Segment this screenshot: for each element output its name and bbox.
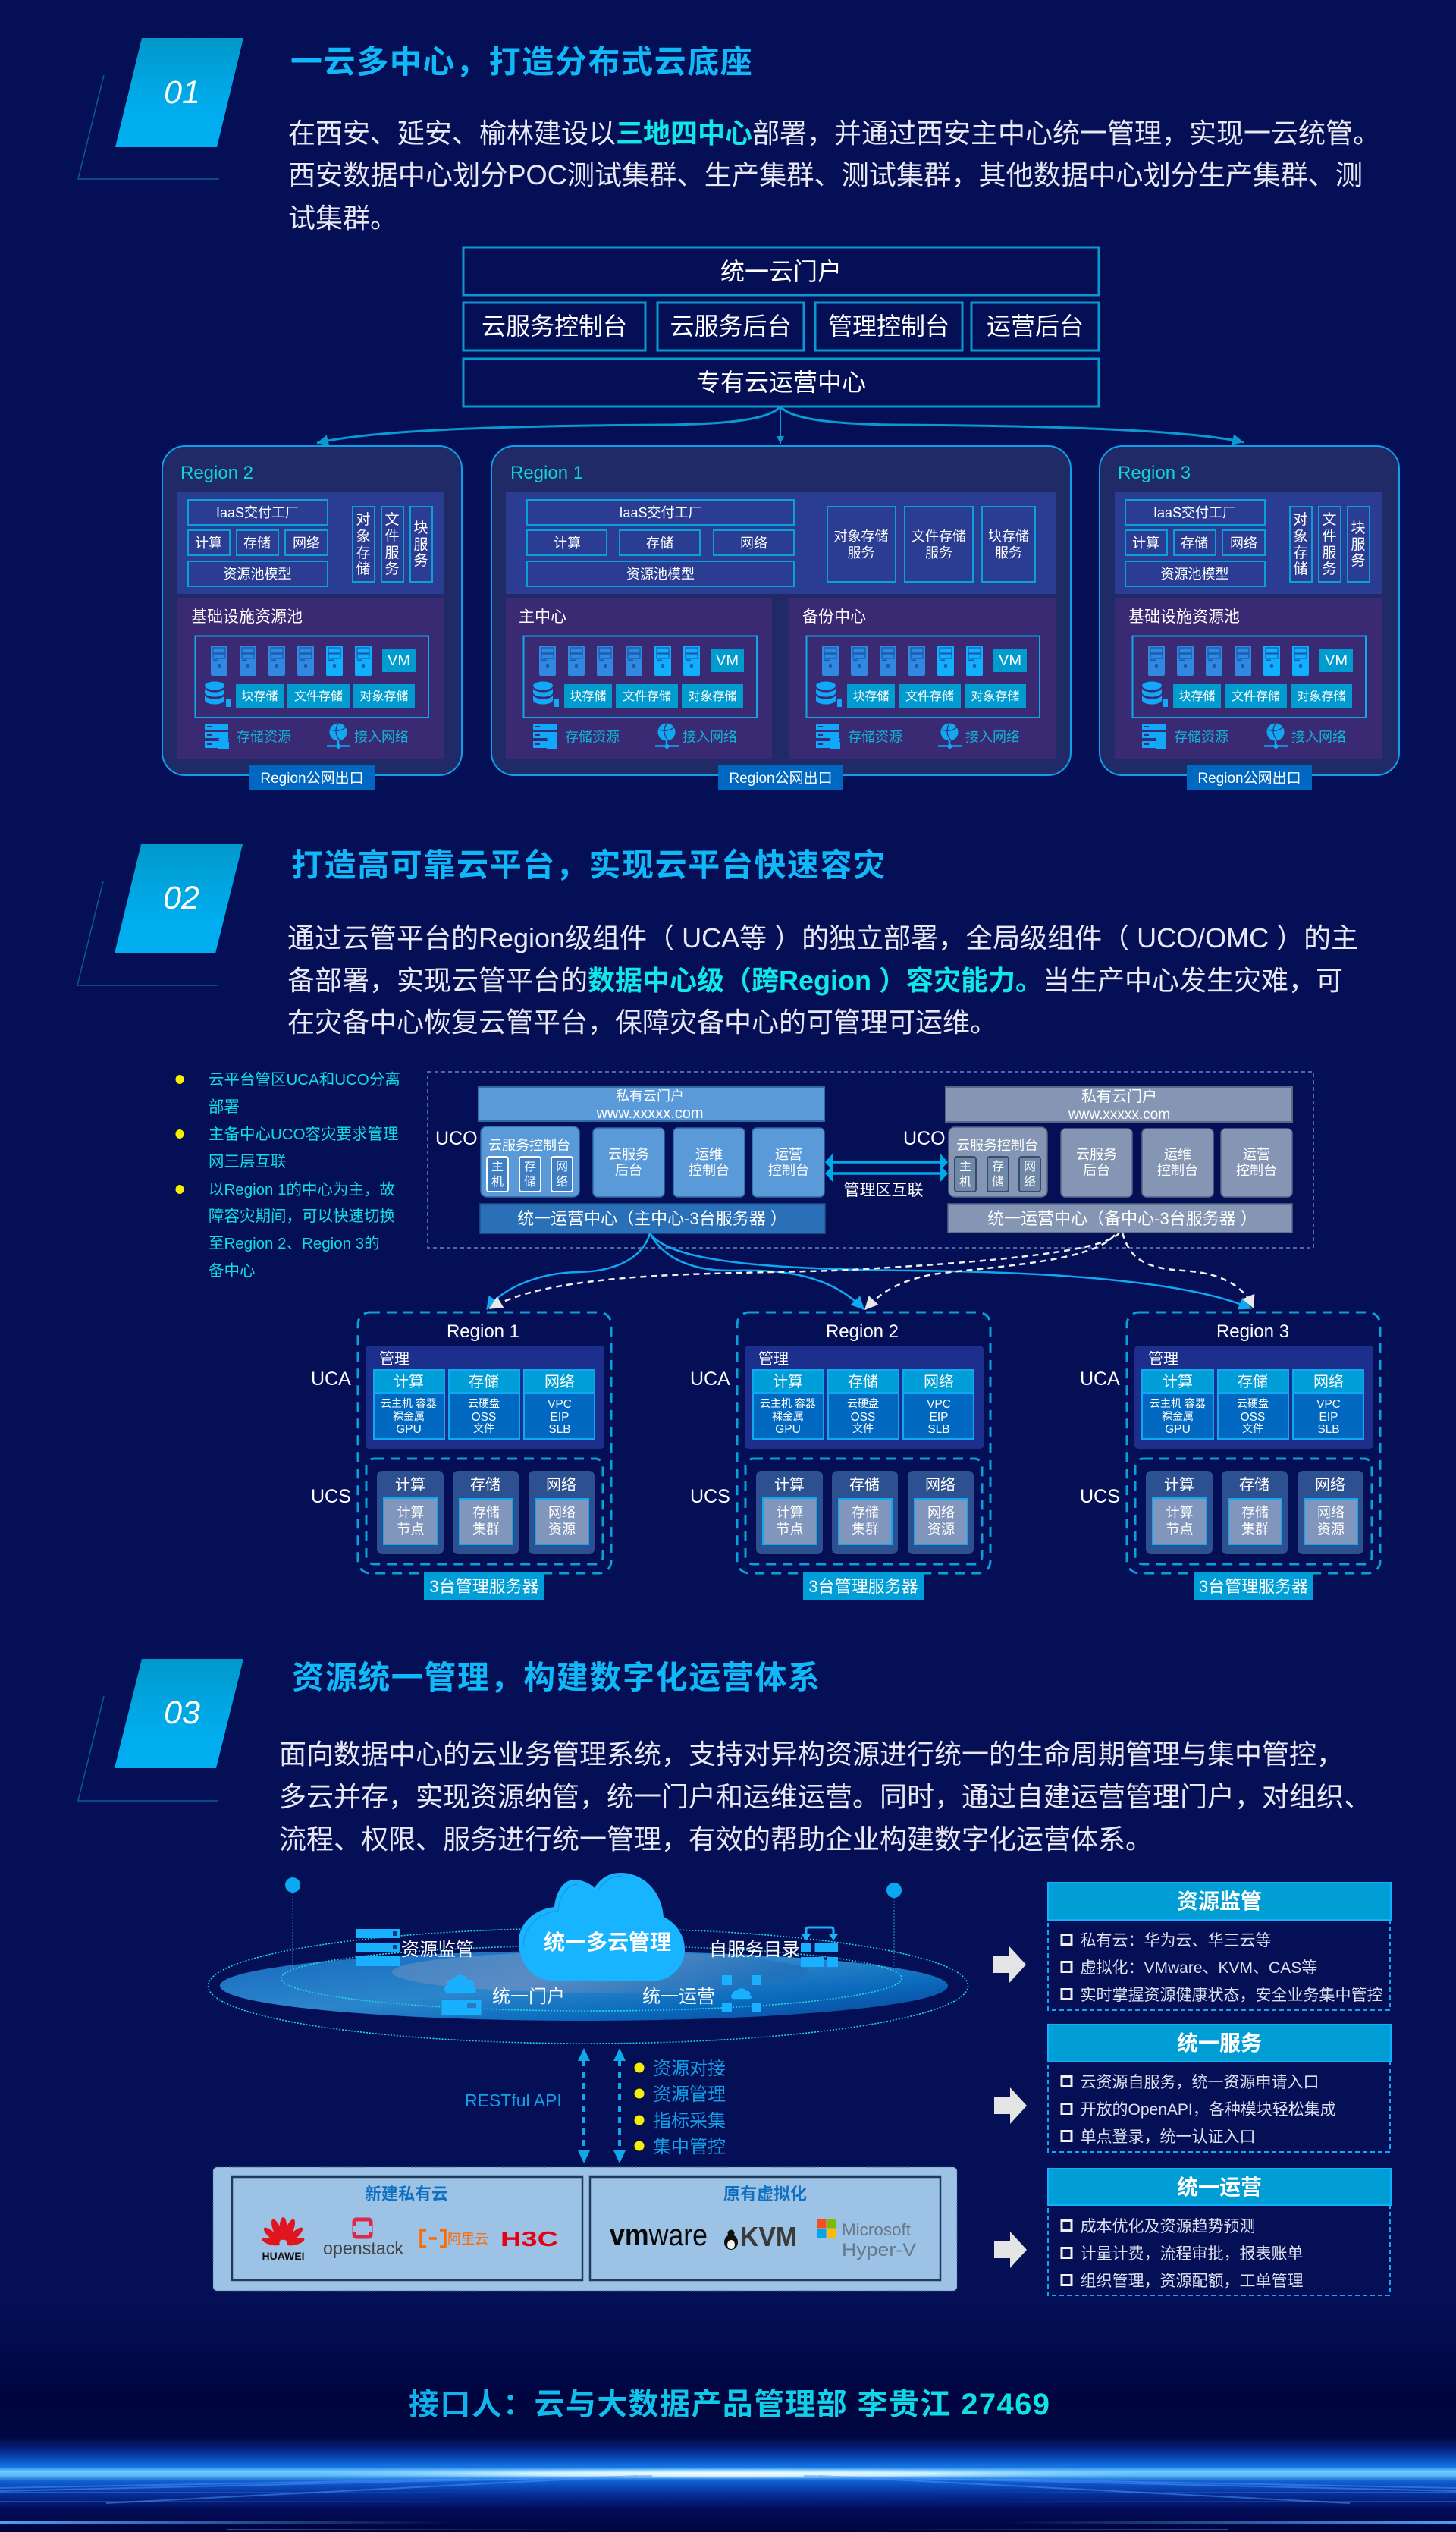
panel: S2 Region 1: 计算: [394, 1373, 424, 1390]
panel: Region 2: 资源池模型: [223, 567, 291, 582]
panel: S2 Region 1: 存储: [470, 1476, 500, 1494]
panel: Region 2: 储: [356, 561, 371, 577]
backup UCO cluster: 云服务: [1076, 1147, 1117, 1162]
primary UCO cluster: 网: [556, 1161, 568, 1173]
panel: Region 3: 服: [1322, 545, 1337, 561]
logo: Aliyun: [421, 2230, 488, 2247]
bullet notes: 至Region 2、Region 3的: [209, 1235, 380, 1252]
panel: S2 Region 3: 资源: [1317, 1522, 1345, 1537]
icon: unified operation: [642, 1975, 761, 2012]
panel: S2 Region 1: 计算: [397, 1505, 425, 1520]
badge 03: 03: [164, 1695, 200, 1731]
panel: S2 Region 3: 存储: [1239, 1476, 1269, 1494]
panel: resource monitoring: [1048, 1883, 1391, 2010]
arrows: portal to regions: [317, 407, 1244, 444]
primary UCO cluster: 机: [491, 1175, 504, 1189]
icon: unified portal: 统一门户: [492, 1987, 565, 2007]
panel: S2 Region 2: UCS: [690, 1486, 730, 1507]
panel: unified operation: 计量计费，流程审批，报表账单: [1080, 2245, 1303, 2263]
panel: Region 2: [162, 446, 462, 790]
box: console row: 云服务控制台: [482, 313, 627, 340]
icon: unified operation: 统一运营: [642, 1987, 715, 2007]
backup UCO cluster: UCO: [903, 1128, 946, 1149]
panel: Region 2: 块存储: [241, 690, 278, 703]
primary UCO cluster: 存: [524, 1160, 536, 1173]
panel: Region 3: 文件存储: [1232, 690, 1280, 703]
panel: S2 Region 3: 网络: [1315, 1476, 1345, 1494]
panel: unified operation: [1048, 2169, 1391, 2295]
panel: unified operation: 成本优化及资源趋势预测: [1080, 2218, 1256, 2235]
logo: openstack: [323, 2219, 404, 2259]
panel: Region 2: 对象存储: [359, 690, 409, 703]
badge 01: [78, 38, 243, 179]
dashed UCO frame: [428, 1072, 1313, 1248]
portal stack diagram: [463, 247, 1099, 407]
icon: central cloud: 统一多云管理: [544, 1930, 671, 1954]
panel: S2 Region 3: 集群: [1241, 1522, 1269, 1537]
badge 03: [78, 1659, 243, 1801]
curves to regions: [487, 1233, 1254, 1309]
logo: Microsoft Hyper-V: Microsoft: [842, 2220, 911, 2239]
API arrows: [465, 2048, 626, 2163]
panel: S2 Region 2: GPU: [775, 1423, 801, 1436]
logo: Huawei: [262, 2217, 305, 2262]
panel: S2 Region 3: 计算: [1166, 1505, 1194, 1520]
panel: Region 1: 块存储: [852, 690, 890, 703]
panel: Region 3: IaaS交付工厂: [1153, 505, 1236, 520]
panel: S2 Region 1: Region 1: [447, 1321, 519, 1342]
panel: S2 Region 2: 网络: [927, 1505, 955, 1520]
panel: Region 2: 接入网络: [354, 730, 409, 745]
panel: Region 3: 网络: [1230, 536, 1257, 551]
box: console row: 云服务后台: [670, 313, 792, 340]
panel: Region 2: 文件存储: [294, 690, 343, 703]
panel: Region 3: 务: [1351, 552, 1366, 569]
panel: S2 Region 2: 文件: [852, 1422, 874, 1434]
primary UCO cluster: 络: [556, 1174, 568, 1189]
panel: Region 1: 接入网络: [682, 730, 737, 745]
panel: Region 1: 文件存储: [905, 690, 954, 703]
paragraph 01: [288, 118, 1380, 234]
panel: S2 Region 3: 存储: [1241, 1505, 1269, 1520]
panel: Region 1: [491, 446, 1071, 790]
panel: S2 Region 2: 云硬盘: [847, 1397, 879, 1409]
panel: Region 1: 存储资源: [848, 730, 902, 745]
panel: unified operation: 统一运营: [1177, 2175, 1262, 2199]
box: unified portal: [463, 247, 1099, 295]
backup UCO cluster: 存: [992, 1160, 1004, 1173]
management interconnect arrows: 管理区互联: [843, 1182, 924, 1199]
panel: S2 Region 3: VPC: [1316, 1398, 1341, 1411]
paragraph 02: 备部署，实现云管平台的数据中心级（跨Region ）容灾能力。当生产中心发生灾难，可: [287, 965, 1343, 996]
panel: S2 Region 1: 裸金属: [393, 1410, 425, 1422]
paragraph 03: [279, 1739, 1371, 1855]
box: operations center: 专有云运营中心: [696, 369, 866, 396]
panel: unified operation: 组织管理，资源配额，工单管理: [1080, 2273, 1303, 2290]
panel: S2 Region 1: 云主机 容器: [381, 1397, 437, 1409]
primary UCO cluster: 运营: [775, 1147, 802, 1162]
logo: H3C: H3C: [500, 2227, 558, 2251]
panel: S2 Region 1: 节点: [397, 1522, 425, 1537]
panel: Region 1: 对象存储: [688, 690, 737, 703]
primary UCO cluster: 主: [491, 1160, 504, 1173]
heading 02: 打造高可靠云平台，实现云平台快速容灾: [291, 847, 886, 883]
panel: resource monitoring: 资源监管: [1177, 1890, 1262, 1913]
icon: unified portal: [441, 1975, 565, 2015]
panel: S2 Region 2: EIP: [930, 1411, 948, 1424]
panel: resource monitoring: 虚拟化：VMware、KVM、CAS等: [1080, 1959, 1317, 1977]
panel: Region 3: VM: [1325, 652, 1348, 669]
primary UCO cluster: 后台: [615, 1163, 642, 1178]
panel: Region 2: 存储: [243, 536, 271, 551]
panel: S2 Region 2: 存储: [852, 1505, 879, 1520]
bullet notes: 云平台管区UCA和UCO分离: [209, 1071, 400, 1089]
panel: Region 3: 接入网络: [1291, 730, 1346, 745]
panel: S2 Region 3: 云硬盘: [1237, 1397, 1269, 1409]
panel: Region 2: 计算: [195, 536, 222, 551]
panel: Region 1: Region 1: [510, 463, 583, 483]
primary UCO cluster: 云服务: [608, 1147, 649, 1162]
box: console row: 管理控制台: [828, 313, 949, 340]
backup UCO cluster: 私有云门户: [1081, 1088, 1157, 1105]
badge 02: 02: [163, 880, 199, 916]
panel: S2 Region 3: EIP: [1320, 1411, 1338, 1424]
panel: Region 1: 存储资源: [565, 730, 620, 745]
section 03: [78, 1659, 1391, 2295]
panel: S2 Region 3: 计算: [1164, 1476, 1194, 1494]
backup UCO cluster: 控制台: [1157, 1163, 1198, 1178]
panel: S2 Region 3: SLB: [1317, 1423, 1340, 1436]
logo: Huawei: HUAWEI: [262, 2250, 305, 2262]
panel: Region 1: VM: [716, 652, 739, 669]
logo: Microsoft Hyper-V: Hyper-V: [842, 2240, 916, 2260]
paragraph 01: 西安数据中心划分POC测试集群、生产集群、测试集群，其他数据中心划分生产集群、测: [288, 159, 1363, 190]
panel: Region 2: 存: [356, 545, 371, 561]
box: unified portal: 统一云门户: [720, 258, 842, 285]
panel: resource monitoring: 私有云：华为云、华三云等: [1080, 1932, 1271, 1949]
panel: Region 2: 务: [384, 561, 400, 577]
backup UCO cluster: 运维: [1164, 1147, 1191, 1162]
panel: S2 Region 2: Region 2: [826, 1321, 899, 1342]
panel: S2 Region 3: 管理: [1148, 1350, 1178, 1368]
panel: S2 Region 3: 网络: [1317, 1505, 1345, 1520]
panel: S2 Region 3: Region 3: [1216, 1321, 1289, 1342]
panel: unified service: 开放的OpenAPI，各种模块轻松集成: [1080, 2101, 1336, 2119]
panel: Region 1: 块存储: [570, 690, 607, 703]
panel: Region 1: 接入网络: [965, 730, 1020, 745]
panel: S2 Region 2: 云主机 容器: [760, 1397, 816, 1409]
panel: Region 3: 件: [1322, 528, 1337, 545]
panel: Region 1: 服务: [848, 545, 875, 561]
panel: Region 3: Region 3: [1118, 463, 1191, 483]
primary UCO cluster: 运维: [695, 1147, 723, 1162]
panel: Region 1: 网络: [740, 536, 767, 551]
panel: Region 1: 主中心: [519, 608, 566, 626]
backup UCO cluster: 储: [992, 1175, 1004, 1189]
primary UCO cluster: 私有云门户: [616, 1089, 684, 1104]
panel: Region 1: 服务: [995, 545, 1022, 561]
management interconnect arrows: [825, 1154, 948, 1199]
panel: S2 Region 1: 存储: [472, 1505, 500, 1520]
panel: Region 2: 对: [356, 511, 371, 528]
panel: Region 1: Region公网出口: [729, 770, 833, 787]
panel: Region 2: 件: [384, 528, 400, 545]
panel: S2 Region 2: SLB: [927, 1423, 950, 1436]
primary UCO cluster: 储: [524, 1175, 536, 1189]
panel: S2 Region 1: UCS: [311, 1486, 351, 1507]
paragraph 02: [287, 922, 1358, 1038]
cloud platform diagram: [208, 1873, 968, 2044]
panel: S2 Region 1: 网络: [548, 1505, 576, 1520]
paragraph 03: 面向数据中心的云业务管理系统，支持对异构资源进行统一的生命周期管理与集中管控，: [279, 1739, 1344, 1770]
bullet notes: [176, 1071, 400, 1280]
capability list: [634, 2059, 726, 2157]
panel: S2 Region 3: 裸金属: [1162, 1410, 1194, 1422]
panel: S2 Region 2: 节点: [777, 1522, 804, 1537]
panel: vendors: [213, 2167, 957, 2291]
panel: unified service: 单点登录，统一认证入口: [1080, 2128, 1256, 2146]
logo: Microsoft Hyper-V: [817, 2219, 916, 2260]
heading 01: 一云多中心，打造分布式云底座: [290, 44, 753, 80]
paragraph 02: 在灾备中心恢复云管平台，保障灾备中心的可管理可运维。: [287, 1007, 997, 1038]
box: console row: 运营后台: [987, 313, 1084, 340]
panel: Region 3: 计算: [1132, 536, 1159, 551]
icon: resource monitoring: [356, 1929, 474, 1966]
panel: S2 Region 1: EIP: [551, 1411, 569, 1424]
logo: vmware: vmware: [610, 2219, 708, 2252]
heading 03: 资源统一管理，构建数字化运营体系: [292, 1660, 821, 1695]
primary UCO cluster: 控制台: [689, 1163, 730, 1178]
panel: Region 3: 存储资源: [1174, 730, 1228, 745]
icon: service catalog: 自服务目录: [709, 1940, 800, 1960]
panel: S2 Region 1: VPC: [548, 1398, 572, 1411]
bullet notes: 备中心: [209, 1262, 255, 1280]
panel: Region 3: 象: [1293, 528, 1308, 545]
panel: S2 Region 2: 计算: [777, 1505, 804, 1520]
capability list: 资源对接: [653, 2059, 726, 2079]
bullet notes: 网三层互联: [209, 1153, 287, 1170]
panel: S2 Region 3: UCA: [1080, 1368, 1120, 1390]
panel: Region 1: 块存储: [988, 529, 1029, 544]
backup UCO cluster: 运营: [1243, 1147, 1270, 1162]
panel: S2 Region 3: OSS: [1241, 1411, 1265, 1424]
panel: Region 3: 块存储: [1178, 690, 1216, 703]
backup UCO cluster: 机: [959, 1175, 971, 1189]
panel: S2 Region 3: 计算: [1163, 1373, 1193, 1390]
panel: S2 Region 3: 3台管理服务器: [1199, 1577, 1308, 1596]
panel: S2 Region 3: GPU: [1165, 1423, 1191, 1436]
backup UCO cluster: 统一运营中心（备中心-3台服务器 ）: [987, 1209, 1257, 1228]
panel: Region 2: VM: [388, 652, 410, 669]
panel: S2 Region 2: [690, 1312, 990, 1600]
panel: Region 1: 对象存储: [834, 529, 889, 544]
capability list: 指标采集: [653, 2111, 726, 2131]
panel: S2 Region 2: 计算: [773, 1373, 803, 1390]
primary UCO cluster: [435, 1087, 825, 1233]
arrows to panels: [993, 1946, 1027, 2268]
bullet notes: 部署: [209, 1098, 240, 1116]
panel: Region 3: 文: [1322, 511, 1337, 528]
panel: Region 3: 资源池模型: [1160, 567, 1228, 582]
panel: Region 2: 存储资源: [237, 730, 291, 745]
panel: S2 Region 3: 网络: [1313, 1373, 1344, 1390]
panel: Region 2: 服: [413, 537, 428, 553]
backup UCO cluster: 云服务控制台: [956, 1138, 1038, 1153]
API arrows: RESTful API: [465, 2091, 562, 2110]
capability list: 集中管控: [653, 2137, 726, 2157]
panel: Region 3: 存储: [1181, 536, 1208, 551]
backup UCO cluster: www.xxxxx.com: [1068, 1107, 1170, 1123]
panel: Region 1: 文件存储: [623, 690, 671, 703]
panel: unified service: [1048, 2025, 1391, 2152]
panel: Region 3: 基础设施资源池: [1128, 608, 1240, 626]
panel: Region 3: [1100, 446, 1399, 790]
icon: service catalog: [709, 1927, 838, 1967]
panel: Region 3: 块: [1351, 520, 1366, 536]
icon: resource monitoring: 资源监管: [401, 1940, 474, 1960]
box: existing virtualization: [590, 2177, 940, 2280]
logo: Aliyun: 阿里云: [447, 2232, 488, 2247]
backup UCO cluster: [903, 1087, 1292, 1233]
bullet notes: 主备中心UCO容灾要求管理: [209, 1126, 399, 1143]
panel: S2 Region 3: 存储: [1238, 1373, 1268, 1390]
panel: S2 Region 3: UCS: [1080, 1486, 1120, 1507]
panel: S2 Region 2: 存储: [849, 1476, 880, 1494]
panel: S2 Region 2: VPC: [927, 1398, 951, 1411]
panel: Region 1: VM: [999, 652, 1021, 669]
panel: Region 3: 储: [1293, 561, 1308, 577]
panel: S2 Region 1: 网络: [544, 1373, 575, 1390]
backup UCO cluster: 主: [959, 1160, 971, 1173]
paragraph 03: 多云并存，实现资源纳管，统一门户和运维运营。同时，通过自建运营管理门户，对组织、: [279, 1781, 1371, 1812]
panel: Region 2: 文: [384, 511, 400, 528]
panel: Region 3: 对象存储: [1297, 690, 1346, 703]
panel: S2 Region 1: 云硬盘: [468, 1397, 500, 1409]
panel: S2 Region 1: UCA: [311, 1368, 351, 1390]
panel: unified service: 统一服务: [1177, 2031, 1262, 2055]
panel: S2 Region 3: 节点: [1166, 1522, 1194, 1537]
panel: S2 Region 1: 资源: [548, 1522, 576, 1537]
panel: S2 Region 2: 集群: [852, 1522, 879, 1537]
panel: Region 2: IaaS交付工厂: [216, 505, 299, 520]
capability list: 资源管理: [653, 2084, 726, 2105]
logo: openstack: openstack: [323, 2238, 404, 2259]
primary UCO cluster: 控制台: [768, 1163, 809, 1178]
panel: S2 Region 1: OSS: [472, 1411, 496, 1424]
panel: S2 Region 1: 网络: [546, 1476, 576, 1494]
panel: Region 1: 计算: [554, 536, 581, 551]
panel: Region 1: 服务: [925, 545, 952, 561]
panel: Region 2: 象: [356, 528, 371, 545]
panel: Region 1: 对象存储: [971, 690, 1020, 703]
primary UCO cluster: www.xxxxx.com: [595, 1105, 704, 1122]
panel: S2 Region 2: OSS: [851, 1411, 875, 1424]
primary UCO cluster: UCO: [435, 1128, 478, 1149]
panel: resource monitoring: 实时掌握资源健康状态，安全业务集中管控: [1080, 1987, 1383, 2004]
badge 01: 01: [164, 74, 200, 111]
panel: S2 Region 1: GPU: [396, 1423, 422, 1436]
paragraph 02: 通过云管平台的Region级组件（ UCA等 ）的独立部署，全局级组件（ UCO/OMC ）的主: [287, 922, 1358, 953]
box: console row: [463, 303, 1099, 350]
panel: S2 Region 2: 资源: [927, 1522, 955, 1537]
backup UCO cluster: 后台: [1083, 1163, 1110, 1178]
icon: central cloud: [519, 1873, 685, 1981]
footer: [0, 2306, 1456, 2532]
backup UCO cluster: 网: [1024, 1161, 1036, 1173]
panel: S2 Region 2: 存储: [848, 1373, 878, 1390]
box: new private cloud: [232, 2177, 582, 2280]
panel: S2 Region 1: [311, 1312, 611, 1600]
bullet notes: 以Region 1的中心为主，故: [209, 1181, 395, 1198]
panel: S2 Region 2: 裸金属: [772, 1410, 804, 1422]
panel: S2 Region 1: 文件: [473, 1422, 494, 1434]
backup UCO cluster: 控制台: [1236, 1163, 1277, 1178]
panel: S2 Region 1: 计算: [395, 1476, 425, 1494]
panel: Region 2: Region公网出口: [260, 770, 364, 787]
badge 02: [77, 844, 243, 985]
panel: S2 Region 2: UCA: [690, 1368, 730, 1390]
paragraph 01: 在西安、延安、榆林建设以三地四中心部署，并通过西安主中心统一管理，实现一云统管。: [288, 118, 1380, 149]
box: new private cloud: 新建私有云: [365, 2185, 448, 2204]
panel: Region 1: 存储: [646, 536, 673, 551]
panel: Region 2: 网络: [293, 536, 320, 551]
panel: Region 2: 块: [413, 520, 428, 536]
logo: KVM: KVM: [740, 2221, 797, 2252]
panel: S2 Region 1: 集群: [472, 1522, 500, 1537]
panel: Region 1: 备份中心: [802, 608, 866, 626]
box: operations center: [463, 359, 1099, 407]
bullet notes: 障容灾期间，可以快速切换: [209, 1208, 395, 1225]
panel: S2 Region 1: 管理: [379, 1350, 410, 1368]
primary UCO cluster: 云服务控制台: [488, 1138, 570, 1153]
panel: Region 1: 资源池模型: [626, 567, 695, 582]
panel: Region 1: 文件存储: [912, 529, 966, 544]
panel: S2 Region 1: SLB: [548, 1423, 571, 1436]
panel: unified service: 云资源自服务，统一资源申请入口: [1080, 2074, 1320, 2091]
panel: S2 Region 1: 存储: [469, 1373, 499, 1390]
panel: Region 2: 基础设施资源池: [191, 608, 303, 626]
primary UCO cluster: 统一运营中心（主中心-3台服务器 ）: [517, 1209, 787, 1228]
paragraph 01: 试集群。: [288, 203, 397, 234]
panel: S2 Region 2: 网络: [924, 1373, 954, 1390]
panel: S2 Region 2: 3台管理服务器: [808, 1577, 918, 1596]
panel: S2 Region 2: 管理: [758, 1350, 789, 1368]
panel: Region 1: IaaS交付工厂: [619, 505, 702, 520]
panel: Region 3: 存: [1293, 545, 1308, 561]
panel: Region 3: 务: [1322, 561, 1337, 577]
panel: Region 3: Region公网出口: [1197, 770, 1301, 787]
panel: S2 Region 2: 网络: [925, 1476, 956, 1494]
panel: S2 Region 3: 文件: [1242, 1422, 1263, 1434]
panel: Region 2: Region 2: [180, 463, 253, 483]
backup UCO cluster: 络: [1024, 1174, 1036, 1189]
pins: [285, 1877, 902, 1971]
box: existing virtualization: 原有虚拟化: [723, 2185, 807, 2204]
contact line: 接口人：云与大数据产品管理部 李贵江 27469: [409, 2388, 1050, 2421]
panel: Region 3: 对: [1293, 511, 1308, 528]
panel: Region 2: 服: [384, 545, 400, 561]
panel: Region 2: 务: [413, 552, 428, 569]
panel: S2 Region 2: 计算: [774, 1476, 805, 1494]
panel: S2 Region 3: 云主机 容器: [1150, 1397, 1206, 1409]
panel: S2 Region 1: 3台管理服务器: [429, 1577, 539, 1596]
panel: Region 3: 服: [1351, 537, 1366, 553]
section 01: [78, 38, 1399, 790]
section 02: [77, 844, 1380, 1600]
paragraph 03: 流程、权限、服务进行统一管理，有效的帮助企业构建数字化运营体系。: [279, 1824, 1153, 1855]
panel: S2 Region 3: [1080, 1312, 1380, 1600]
